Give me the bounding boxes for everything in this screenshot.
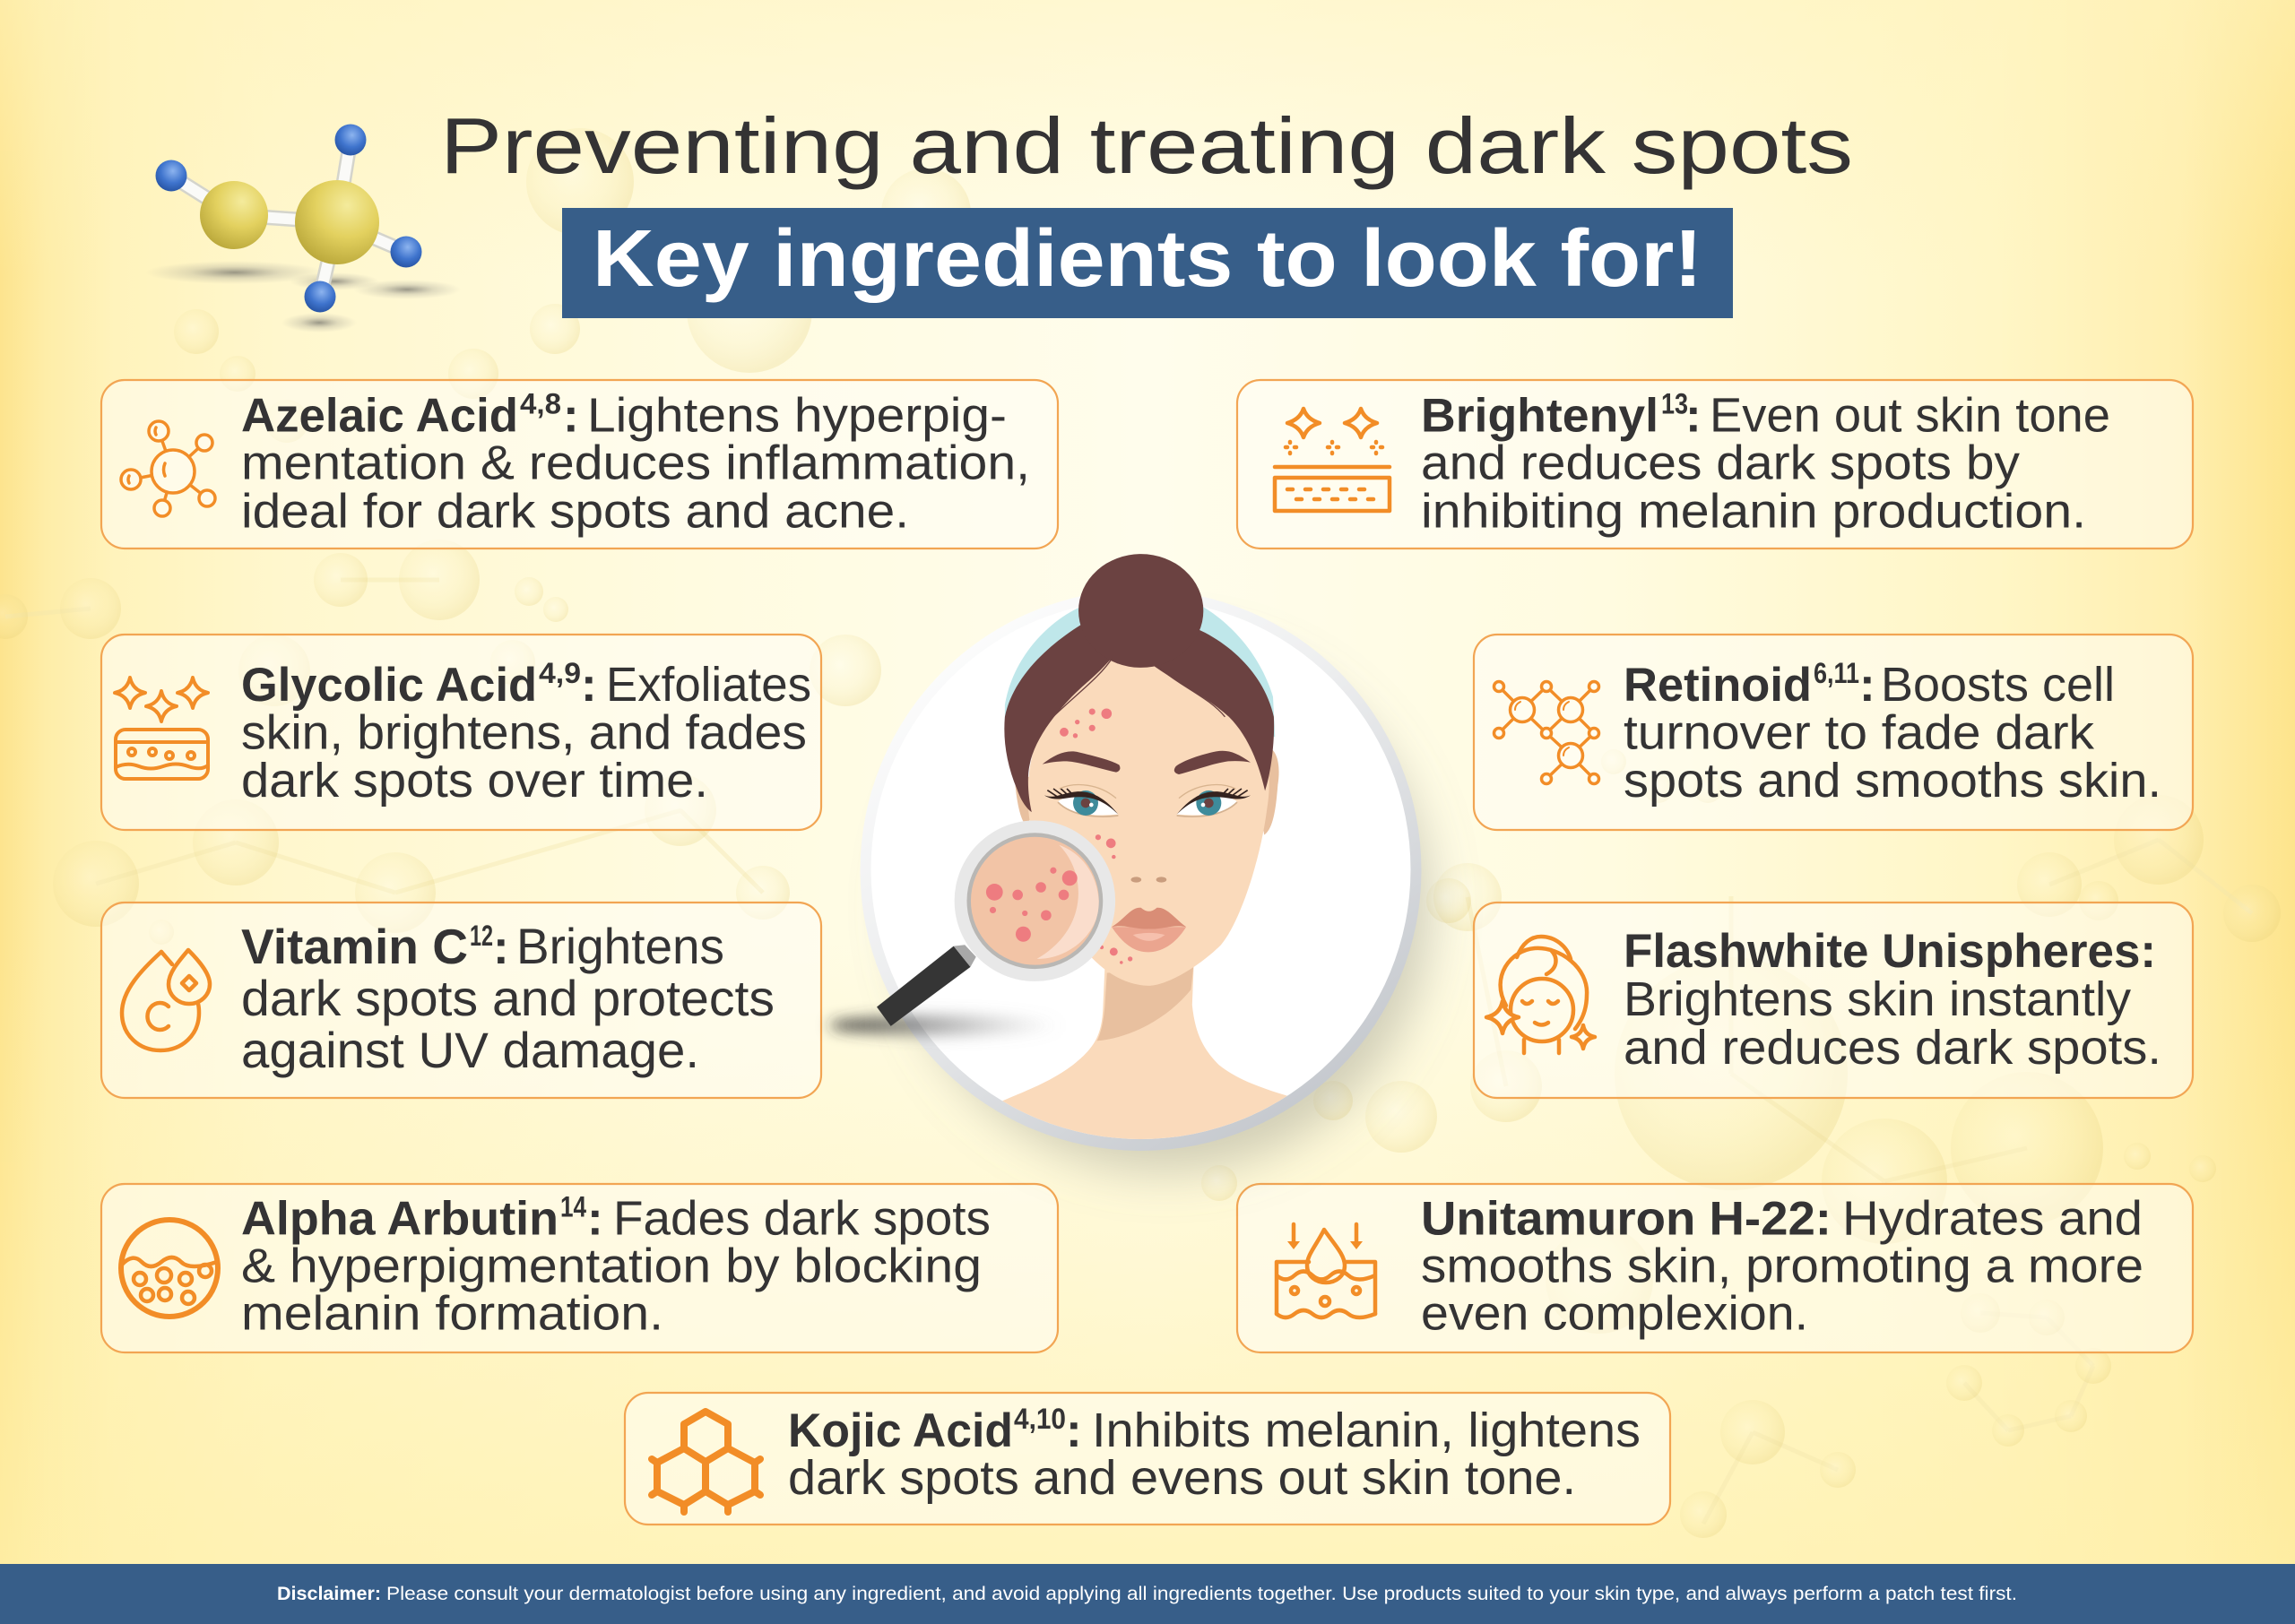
Brightenyl text (1421, 387, 2110, 538)
ears (1257, 747, 1279, 835)
Unitamuron H-22 text: smooths skin, promoting a more (1421, 1239, 2143, 1292)
neck and shoulders (1002, 967, 1287, 1139)
Alpha Arbutin text: & hyperpigmentation by blocking (241, 1239, 982, 1292)
panel: Azelaic Acid (101, 380, 1058, 549)
eyes and eyebrows (1043, 751, 1251, 816)
Kojic Acid text: : (1066, 1404, 1082, 1457)
Vitamin C text: against UV damage. (241, 1022, 699, 1078)
Brightenyl text: inhibiting melanin production. (1421, 484, 2086, 538)
Vitamin C text: dark spots and protects (241, 970, 775, 1026)
Retinoid text: 6,11 (1814, 657, 1859, 689)
skin spots (1060, 708, 1132, 964)
right eyebrow (1174, 751, 1251, 774)
footer disclaimer bar: Disclaimer: (277, 1584, 381, 1604)
Kojic Acid text: 4,10 (1014, 1403, 1066, 1435)
Flashwhite Unispheres text (1624, 925, 2161, 1075)
Glycolic Acid text: 4,9 (539, 657, 581, 689)
circle soft shadow (900, 642, 1431, 1172)
second nostril (1156, 877, 1166, 883)
circle frame (861, 590, 1422, 1151)
Retinoid text: Boosts cell (1881, 658, 2115, 712)
panel: Vitamin C (101, 903, 821, 1098)
Glycolic Acid text: dark spots over time. (241, 754, 708, 808)
Vitamin C text: : (493, 921, 509, 974)
left eyebrow (1043, 751, 1120, 773)
Flashwhite Unispheres text: and reduces dark spots. (1624, 1021, 2161, 1075)
banner heading: Key ingredients to look for! (593, 214, 1702, 304)
footer disclaimer bar (0, 1564, 2295, 1624)
icon: face with towel and sparkles (1486, 937, 1595, 1053)
Alpha Arbutin text: : (587, 1192, 603, 1246)
icon: skin layer with sparkles (1275, 409, 1390, 511)
Glycolic Acid text: Exfoliates (606, 658, 811, 712)
Glycolic Acid text: Glycolic Acid (241, 659, 537, 712)
icon: molecule cluster (121, 421, 215, 516)
lips (1112, 908, 1186, 952)
Vitamin C text (241, 918, 775, 1078)
Flashwhite Unispheres text: Brightens skin instantly (1624, 972, 2131, 1026)
panel: Kojic Acid (625, 1393, 1670, 1525)
Retinoid text: spots and smooths skin. (1624, 754, 2161, 808)
Kojic Acid text: Inhibits melanin, lightens (1092, 1404, 1641, 1457)
nose (1131, 877, 1141, 883)
Unitamuron H-22 text: even complexion. (1421, 1287, 1808, 1341)
Brightenyl text: Brightenyl (1421, 389, 1658, 443)
Unitamuron H-22 text (1421, 1192, 2143, 1341)
icon: vitamin C drops (122, 950, 210, 1050)
panel: Unitamuron H-22 (1237, 1184, 2193, 1352)
Retinoid text: : (1859, 659, 1875, 712)
Glycolic Acid text (241, 657, 811, 808)
panel: Glycolic Acid (101, 635, 821, 830)
Vitamin C text: Brightens (516, 918, 724, 974)
magnifier shadow (829, 1015, 1062, 1035)
Kojic Acid text (788, 1403, 1641, 1505)
magnifying glass (877, 820, 1115, 1026)
footer disclaimer bar: Please consult your dermatologist before using any ingredient, and avoid applying all ingredients together. Use products suited to your skin type, and always perform a patch test first. (386, 1584, 2017, 1604)
Retinoid text: turnover to fade dark (1624, 706, 2095, 760)
hair (1004, 625, 1274, 812)
Brightenyl text: and reduces dark spots by (1421, 436, 2020, 489)
icon: skin cross-section circle (121, 1220, 218, 1317)
panel: Brightenyl (1237, 380, 2193, 549)
Retinoid text (1624, 657, 2161, 808)
hair bun (1078, 554, 1203, 668)
Azelaic Acid text: 4,8 (520, 387, 561, 419)
molecule illustration (145, 124, 461, 333)
title: Preventing and treating dark spots (440, 101, 1853, 190)
head (1004, 554, 1279, 986)
Glycolic Acid text: skin, brightens, and fades (241, 706, 807, 760)
central illustration: face with magnifier (829, 554, 1431, 1172)
Alpha Arbutin text: Fades dark spots (613, 1192, 991, 1246)
Brightenyl text: : (1685, 389, 1702, 443)
Unitamuron H-22 text: Unitamuron H-22: (1421, 1192, 1832, 1246)
icon: hydrated skin with droplet (1277, 1224, 1375, 1317)
Alpha Arbutin text: 14 (560, 1190, 586, 1222)
Azelaic Acid text: Lightens hyperpig- (587, 389, 1007, 443)
Azelaic Acid text (241, 387, 1030, 538)
icon: honeycomb hexagons (652, 1412, 760, 1512)
Alpha Arbutin text (241, 1190, 991, 1341)
panel: Alpha Arbutin (101, 1184, 1058, 1352)
Kojic Acid text: Kojic Acid (788, 1404, 1013, 1457)
face skin (1027, 637, 1269, 986)
Vitamin C text: Vitamin C (241, 919, 468, 974)
Vitamin C text: 12 (470, 920, 493, 952)
Glycolic Acid text: : (581, 659, 597, 712)
Azelaic Acid text: : (563, 389, 579, 443)
right eye (1177, 785, 1251, 816)
Azelaic Acid text: ideal for dark spots and acne. (241, 484, 909, 538)
panel: Flashwhite Unispheres (1474, 903, 2193, 1098)
Brightenyl text: Even out skin tone (1710, 389, 2110, 443)
Azelaic Acid text: Azelaic Acid (241, 389, 518, 443)
icon: exfoliated skin with stars (115, 678, 208, 779)
Alpha Arbutin text: melanin formation. (241, 1287, 663, 1341)
Flashwhite Unispheres text: Flashwhite Unispheres: (1624, 925, 2156, 978)
Kojic Acid text: dark spots and evens out skin tone. (788, 1451, 1576, 1505)
Unitamuron H-22 text: Hydrates and (1842, 1192, 2143, 1246)
panel: Retinoid (1474, 635, 2193, 830)
Alpha Arbutin text: Alpha Arbutin (241, 1192, 559, 1246)
Retinoid text: Retinoid (1624, 659, 1812, 712)
icon: molecular lattice (1494, 681, 1599, 783)
Brightenyl text: 13 (1661, 387, 1688, 419)
headband (1005, 607, 1275, 737)
left eye (1044, 785, 1118, 816)
hair strands (1049, 657, 1225, 721)
Azelaic Acid text: mentation & reduces inflammation, (241, 436, 1030, 489)
